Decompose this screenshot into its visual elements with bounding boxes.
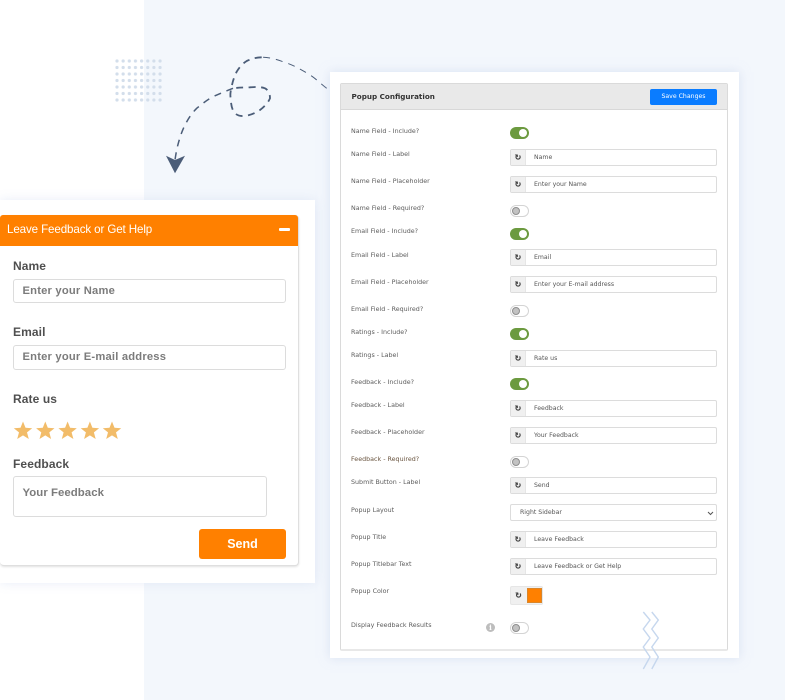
send button: Send — [227, 536, 258, 550]
toggle on — [510, 127, 529, 139]
label: Submit Button - Label — [351, 478, 420, 486]
label: Popup Color — [351, 588, 389, 594]
email input — [13, 344, 286, 370]
color picker: ↻ — [515, 591, 522, 600]
select: popup layout: Right Sidebar — [520, 509, 562, 516]
panel: feedback widget card — [0, 200, 315, 583]
widget title bar — [0, 215, 298, 246]
input: Leave Feedback — [534, 536, 584, 543]
input — [510, 531, 717, 548]
input: Enter your Name — [534, 181, 587, 188]
label: Email Field - Label — [351, 252, 409, 258]
input: Send — [534, 482, 550, 489]
input: ↻ — [515, 535, 521, 544]
input: ↻ — [515, 404, 521, 413]
label: Email Field - Include? — [351, 228, 418, 234]
input: ↻ — [515, 562, 521, 571]
icon: info — [486, 623, 495, 632]
input — [510, 477, 717, 494]
label: Feedback - Label — [351, 402, 405, 408]
color picker — [510, 586, 543, 605]
dot grid decoration — [116, 59, 162, 102]
zigzag decoration — [642, 612, 659, 670]
panel title: Popup Configuration — [352, 92, 435, 101]
input — [510, 276, 717, 293]
label: Feedback - Include? — [351, 378, 414, 386]
icon: arrowhead — [166, 156, 185, 173]
input: ↻ — [515, 481, 521, 490]
select: popup layout — [510, 504, 717, 521]
save button — [650, 88, 717, 104]
toggle off — [510, 305, 529, 317]
label: Feedback - Required? — [351, 456, 419, 462]
toggle on — [510, 328, 529, 340]
toggle on — [510, 228, 529, 240]
input — [510, 149, 717, 166]
dashed arrow with loop — [166, 56, 327, 174]
feedback widget — [0, 215, 299, 566]
label: Popup Title — [351, 534, 386, 540]
toggle off — [510, 456, 529, 468]
feedback textarea: Your Feedback — [22, 487, 104, 499]
email input: Enter your E-mail address — [22, 350, 166, 362]
icon: info: i — [489, 623, 492, 632]
input — [510, 350, 717, 367]
input — [510, 427, 717, 444]
toggle off — [510, 622, 529, 634]
toggle on — [510, 378, 529, 390]
input: Rate us — [534, 355, 557, 362]
name label: Name — [13, 259, 46, 273]
input — [510, 249, 717, 266]
widget title bar: Leave Feedback or Get Help — [7, 223, 152, 236]
label: Name Field - Required? — [351, 204, 424, 212]
input: Enter your E-mail address — [534, 281, 614, 288]
configuration panel — [340, 83, 728, 651]
label: Ratings - Include? — [351, 328, 408, 336]
label: Feedback - Placeholder — [351, 428, 425, 436]
input: ↻ — [515, 431, 521, 440]
input: ↻ — [515, 280, 521, 289]
panel header — [341, 84, 727, 110]
label: Popup Layout — [351, 506, 394, 514]
input: Your Feedback — [534, 432, 579, 439]
input: Name — [534, 154, 552, 161]
input: ↻ — [515, 153, 521, 162]
input: ↻ — [515, 354, 521, 363]
name input — [13, 278, 286, 303]
feedback textarea — [13, 476, 267, 517]
input: ↻ — [515, 253, 521, 262]
send button — [199, 528, 286, 558]
label: Display Feedback Results — [351, 622, 432, 628]
save button: Save Changes — [661, 92, 706, 100]
input: Leave Feedback or Get Help — [534, 563, 621, 570]
input — [510, 558, 717, 575]
panel: configuration card — [330, 72, 739, 658]
rate label: Rate us — [13, 392, 57, 406]
label: Email Field - Required? — [351, 306, 423, 312]
toggle off — [510, 205, 529, 217]
input: ↻ — [515, 180, 521, 189]
label: Ratings - Label — [351, 352, 398, 358]
label: Popup Titlebar Text — [351, 560, 412, 568]
star rating — [14, 422, 122, 439]
input: Email — [534, 254, 551, 261]
label: Name Field - Placeholder — [351, 178, 430, 184]
input: Feedback — [534, 405, 563, 412]
label: Name Field - Label — [351, 150, 410, 158]
label: Name Field - Include? — [351, 128, 419, 134]
icon: minimize — [279, 228, 290, 231]
name input: Enter your Name — [22, 284, 115, 296]
label: Email Field - Placeholder — [351, 278, 429, 286]
feedback label: Feedback — [13, 457, 69, 471]
input — [510, 400, 717, 417]
input — [510, 176, 717, 193]
email label: Email — [13, 325, 46, 339]
